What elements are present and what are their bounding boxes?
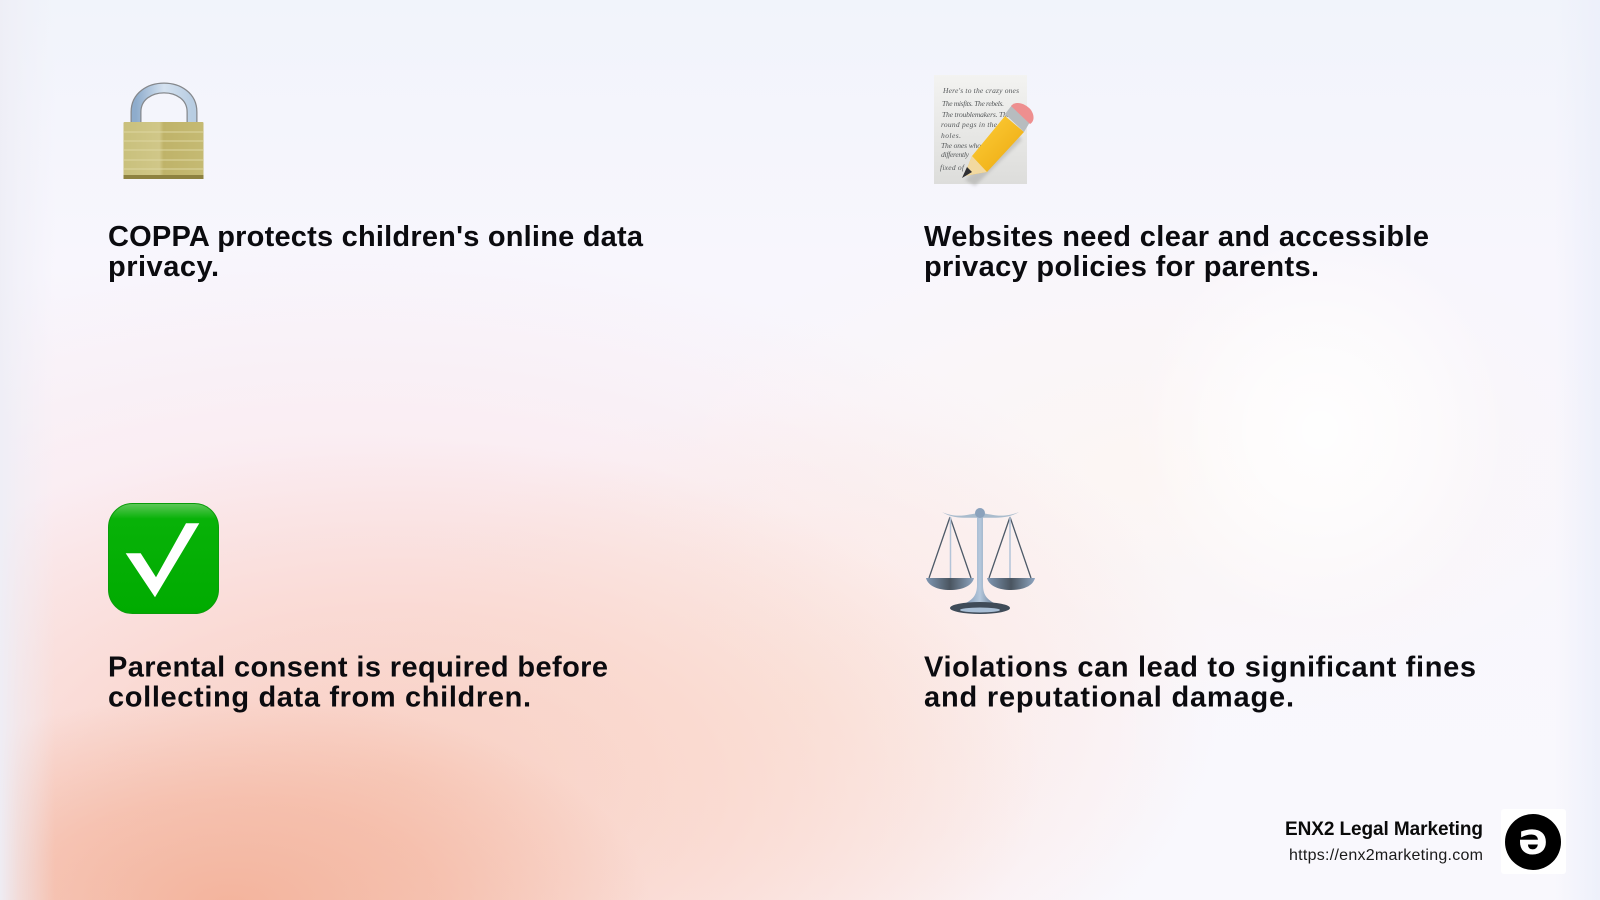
icon: memo and pencil: The troublemakers. The: [942, 110, 1011, 119]
icon: memo and pencil: Here's to the crazy ones: [942, 86, 1019, 95]
icon: logo: ə: [1518, 814, 1548, 865]
heading: parental consent: collecting data from children.: [108, 682, 531, 714]
icon: padlock: [124, 88, 204, 179]
heading: parental consent: [108, 652, 608, 714]
brand name: ENX2 Legal Marketing: [1285, 819, 1483, 840]
icon: green check box: [108, 504, 218, 614]
icon: memo and pencil: fixed of: [940, 163, 965, 172]
icon: balance scale: [926, 508, 1035, 614]
icon: memo and pencil: differently: [941, 150, 970, 159]
panel: privacy policies: [924, 75, 1429, 283]
footer: brand: [1285, 809, 1566, 874]
heading: COPPA: COPPA protects children's online data: [108, 221, 644, 253]
icon: memo and pencil: [934, 75, 1034, 186]
heading: COPPA: [108, 221, 644, 283]
icon: logo: [1501, 809, 1566, 874]
panel: COPPA protects data: [108, 88, 644, 283]
heading: COPPA: privacy.: [108, 251, 219, 283]
icon: memo and pencil: The misfits. The rebels.: [942, 99, 1004, 108]
heading: violations: [924, 652, 1476, 714]
icon: memo and pencil: The ones who: [941, 141, 981, 150]
heading: privacy policies: Websites need clear and accessible: [924, 221, 1429, 253]
panel: parental consent: [108, 504, 608, 714]
brand url: https://enx2marketing.com: [1289, 847, 1483, 864]
heading: parental consent: Parental consent is required before: [108, 652, 608, 684]
heading: violations: Violations can lead to significant fines: [924, 652, 1476, 684]
heading: privacy policies: privacy policies for parents.: [924, 251, 1319, 283]
heading: violations: and reputational damage.: [924, 682, 1294, 714]
icon: memo and pencil: holes.: [941, 131, 961, 140]
icon: memo and pencil: round pegs in the: [941, 120, 998, 129]
heading: privacy policies: [924, 221, 1429, 283]
panel: violations: [924, 508, 1476, 714]
